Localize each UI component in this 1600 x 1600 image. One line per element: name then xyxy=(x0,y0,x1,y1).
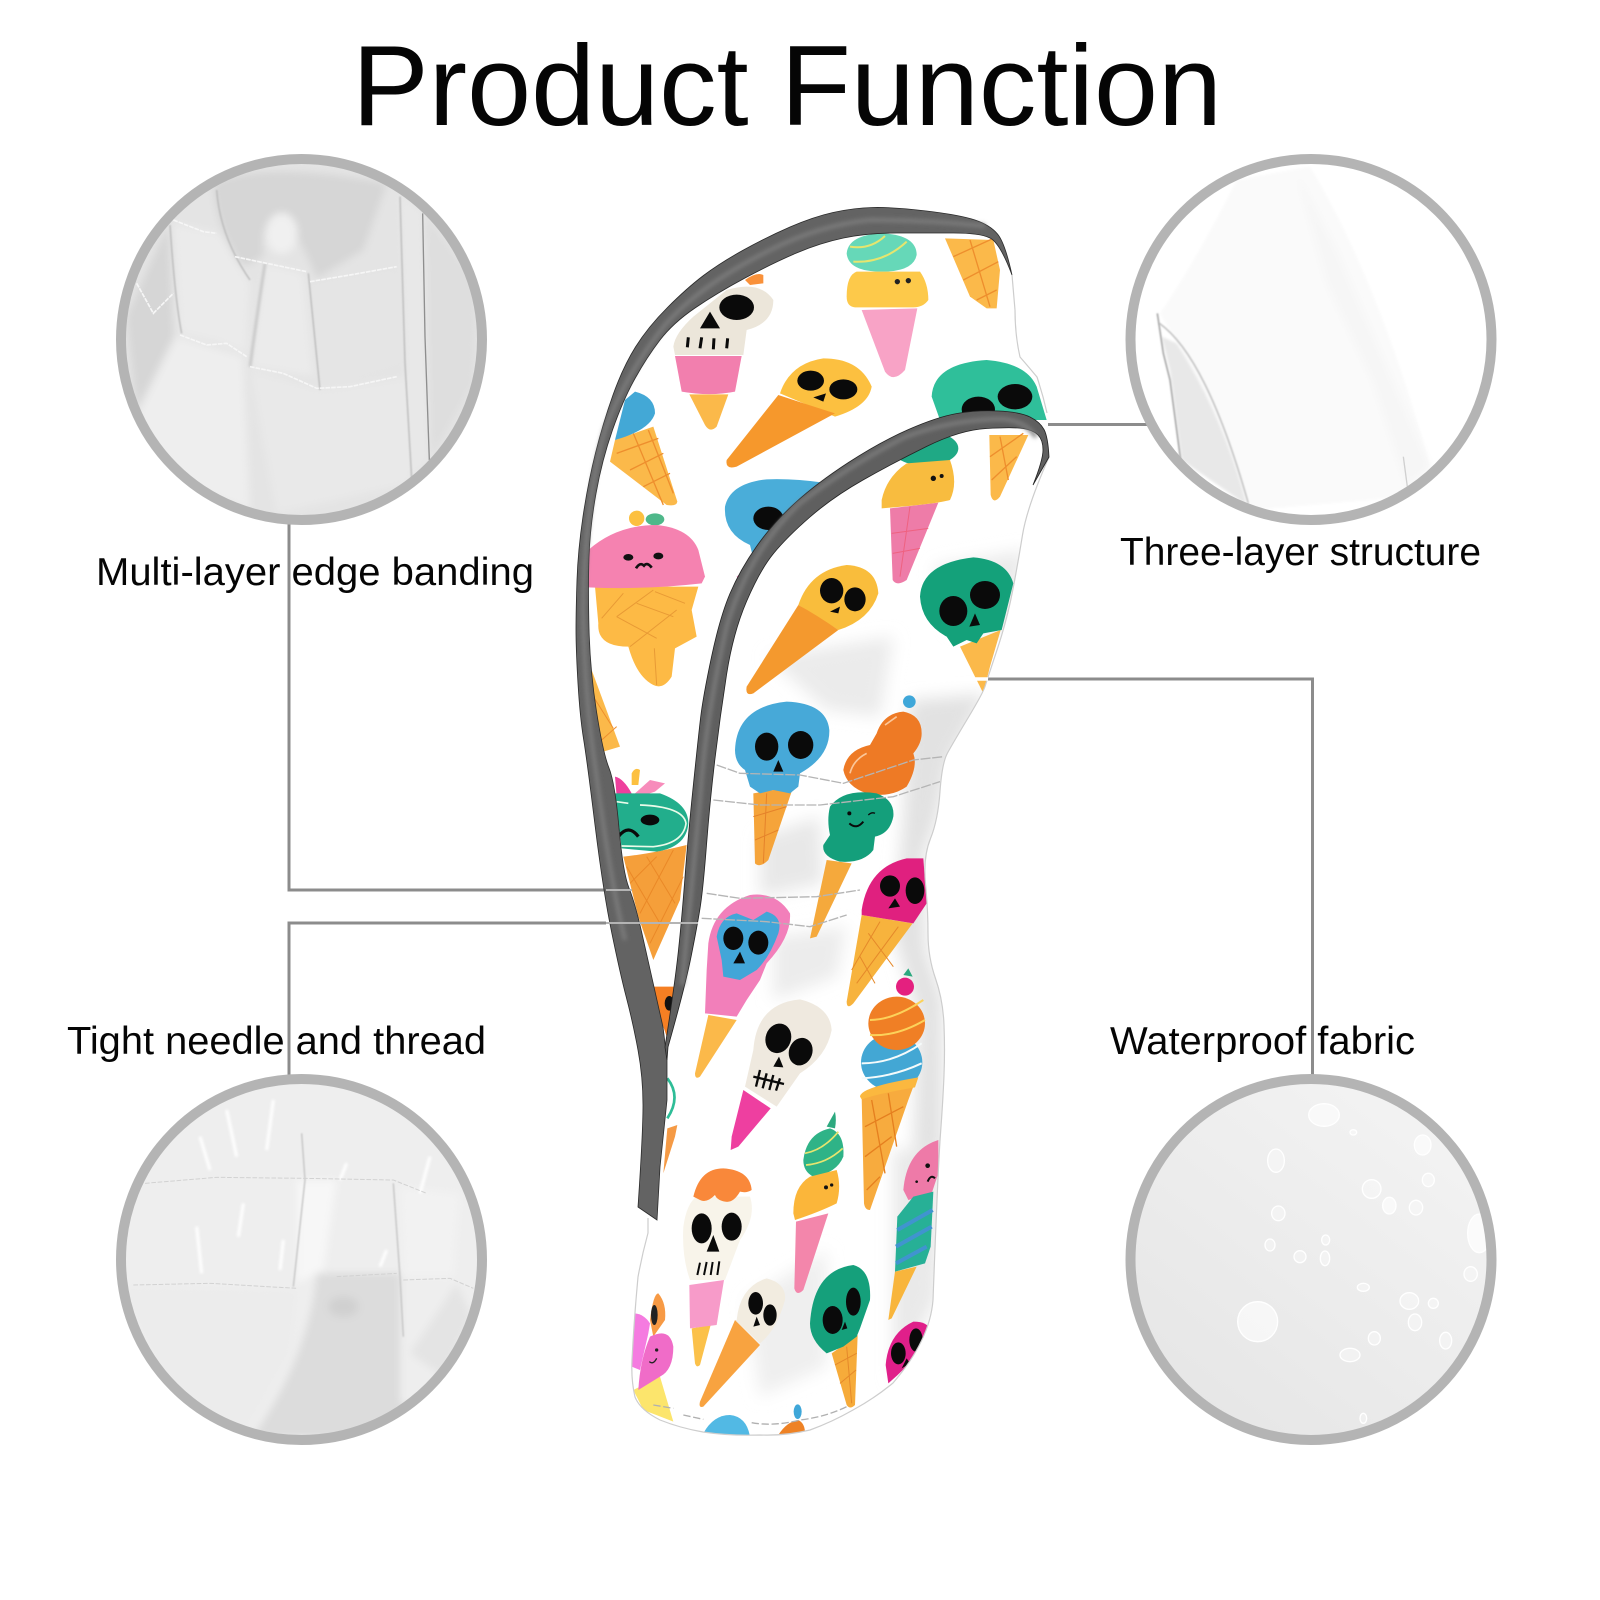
circle ring xyxy=(1130,159,1492,520)
back pattern upper xyxy=(588,233,1047,686)
front pattern upper xyxy=(746,431,1028,694)
front pattern middle xyxy=(695,695,943,1150)
ice cream: teal and yellow scoops xyxy=(847,233,928,377)
detail circle: tight needle and thread xyxy=(110,1070,500,1460)
back panel with pattern xyxy=(588,234,1047,1036)
leader line: waterproof fabric xyxy=(985,679,1312,1076)
ice cream: cream skull pink cone xyxy=(673,274,773,430)
bottom stitching xyxy=(653,1405,847,1424)
ice cream: orange blob scoops xyxy=(843,695,922,795)
ice cream: teal skull xyxy=(932,360,1047,422)
leader line: tight needle and thread xyxy=(289,923,606,1076)
fabric silhouette edge xyxy=(632,275,1049,1435)
ice cream: green skull bottom xyxy=(810,1265,870,1407)
ice cream: magenta skull xyxy=(847,858,927,1006)
ice cream: blue scoop bottom xyxy=(703,1415,750,1437)
band highlights xyxy=(583,220,1036,985)
ice cream: green yellow scoops pink cone xyxy=(793,1112,843,1293)
ice cream: small cream skull xyxy=(700,1278,785,1407)
ice cream: green skull xyxy=(920,557,1013,693)
product: golf headcover xyxy=(560,190,1060,1450)
inner flap binding band xyxy=(665,411,1049,1060)
ice cream: magenta skull bottom xyxy=(886,1322,929,1383)
back pattern lower xyxy=(592,670,688,1037)
white leader line over fabric xyxy=(913,677,988,681)
detail circle: three-layer structure xyxy=(1120,150,1510,540)
circle ring xyxy=(1130,1079,1492,1440)
ice cream: pink scoops bottom left xyxy=(632,1293,673,1422)
label: waterproof fabric: Waterproof fabric xyxy=(1110,1020,1415,1063)
ice cream: cream skull magenta cone xyxy=(731,999,832,1150)
circle ring xyxy=(121,159,482,520)
detail circle: multi-layer edge banding xyxy=(110,150,500,540)
ice cream: pink and blue skull xyxy=(695,895,790,1078)
front panel with pattern xyxy=(632,432,1028,1435)
ice cream: yellow skull xyxy=(746,565,878,694)
fold shading xyxy=(127,172,477,513)
leader line: three-layer structure xyxy=(1048,423,1148,426)
ice cream: orange fragment xyxy=(654,986,674,1036)
ice cream: orange cone under flap xyxy=(989,433,1028,500)
outer binding band xyxy=(576,207,1012,1220)
detail circle: waterproof fabric xyxy=(1120,1070,1510,1460)
ice cream: blue scoop xyxy=(610,392,677,505)
label: multi-layer edge banding: Multi-layer edge banding xyxy=(96,551,534,594)
ice cream: yellow cone top right xyxy=(945,238,1000,308)
ice cream: small cone lower left xyxy=(592,670,620,752)
title: Product Function xyxy=(352,23,1222,150)
ice cream: pink hat large cone xyxy=(588,511,705,686)
ice cream: yellow scoop pink cone xyxy=(882,431,958,583)
front pattern lower xyxy=(632,968,938,1437)
ice cream: cream skull orange cap xyxy=(683,1168,752,1366)
ice cream: pink flower teal scoop xyxy=(615,769,688,960)
leader lines crossing the bands xyxy=(606,890,698,923)
ice cream: orange scoop bottom xyxy=(778,1404,805,1435)
leader line: multi-layer edge banding xyxy=(289,524,606,890)
water droplets xyxy=(1238,1104,1491,1423)
ice cream: orange and blue scoops with cherry xyxy=(860,968,925,1210)
fabric shading xyxy=(747,550,1027,1397)
label: three-layer structure: Three-layer structure xyxy=(1120,531,1481,574)
ice cream: yellow skull orange cone xyxy=(726,358,872,467)
ice cream: pink and teal scoops xyxy=(888,1140,938,1320)
ice cream: green ring fragment xyxy=(663,1078,677,1173)
label: tight needle and thread: Tight needle and thread xyxy=(67,1020,486,1063)
ice cream: blue skull xyxy=(724,479,820,578)
fold shading xyxy=(1157,167,1430,510)
fold shading xyxy=(120,1100,473,1437)
circle ring xyxy=(121,1079,482,1440)
ice cream: green face scoop xyxy=(810,792,893,938)
stitching seams xyxy=(702,757,943,927)
ice cream: blue skull xyxy=(735,702,829,865)
